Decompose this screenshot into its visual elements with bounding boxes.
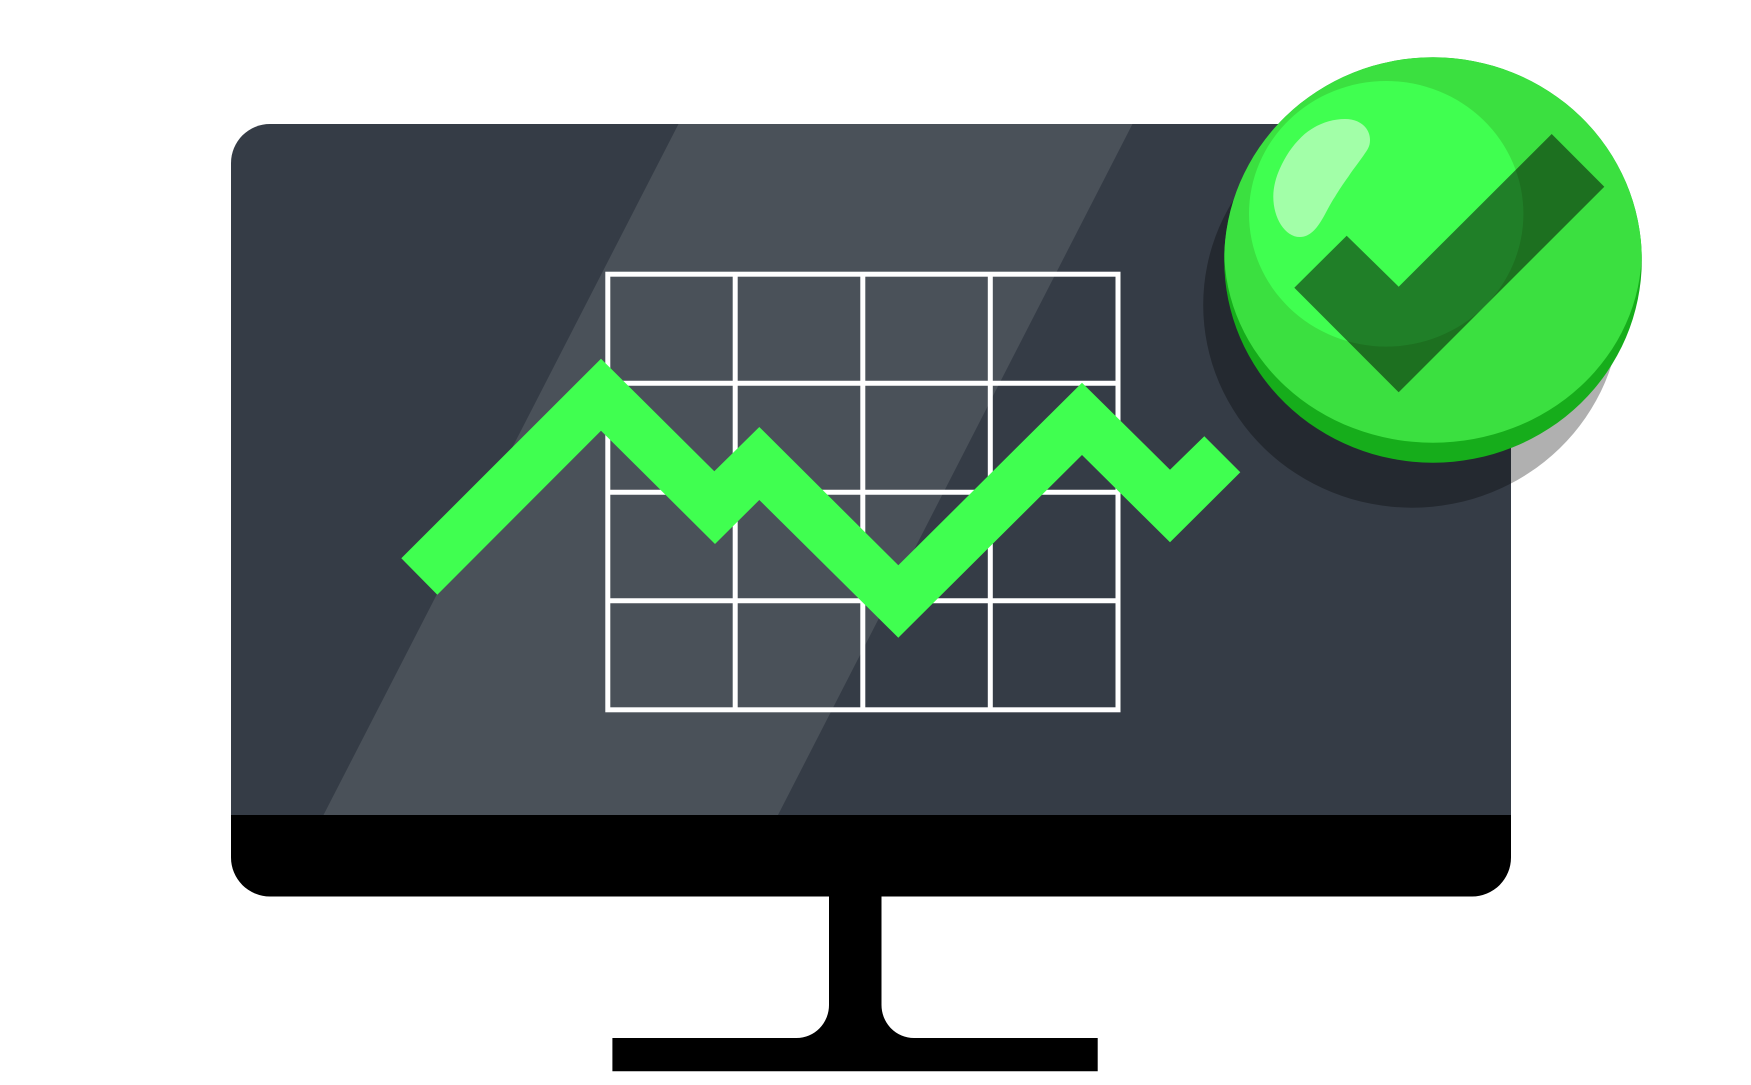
monitor bbox=[231, 124, 1511, 1071]
screen glare band bbox=[324, 124, 1132, 815]
check badge bbox=[1203, 57, 1642, 508]
badge bright inner disc bbox=[1249, 81, 1523, 347]
monitor screen bbox=[231, 124, 1511, 815]
chart grid bbox=[608, 274, 1118, 710]
icon: check mark bbox=[1294, 134, 1604, 392]
monitor stand and base bbox=[612, 890, 1098, 1071]
illustration: monitor with line chart and check badge bbox=[231, 57, 1642, 1072]
green zigzag line bbox=[401, 359, 1240, 638]
badge main disc bbox=[1224, 57, 1642, 443]
badge specular highlight bbox=[1273, 119, 1370, 237]
badge dark rim bbox=[1224, 57, 1642, 463]
badge drop shadow bbox=[1203, 102, 1621, 508]
monitor bezel bbox=[231, 810, 1511, 896]
